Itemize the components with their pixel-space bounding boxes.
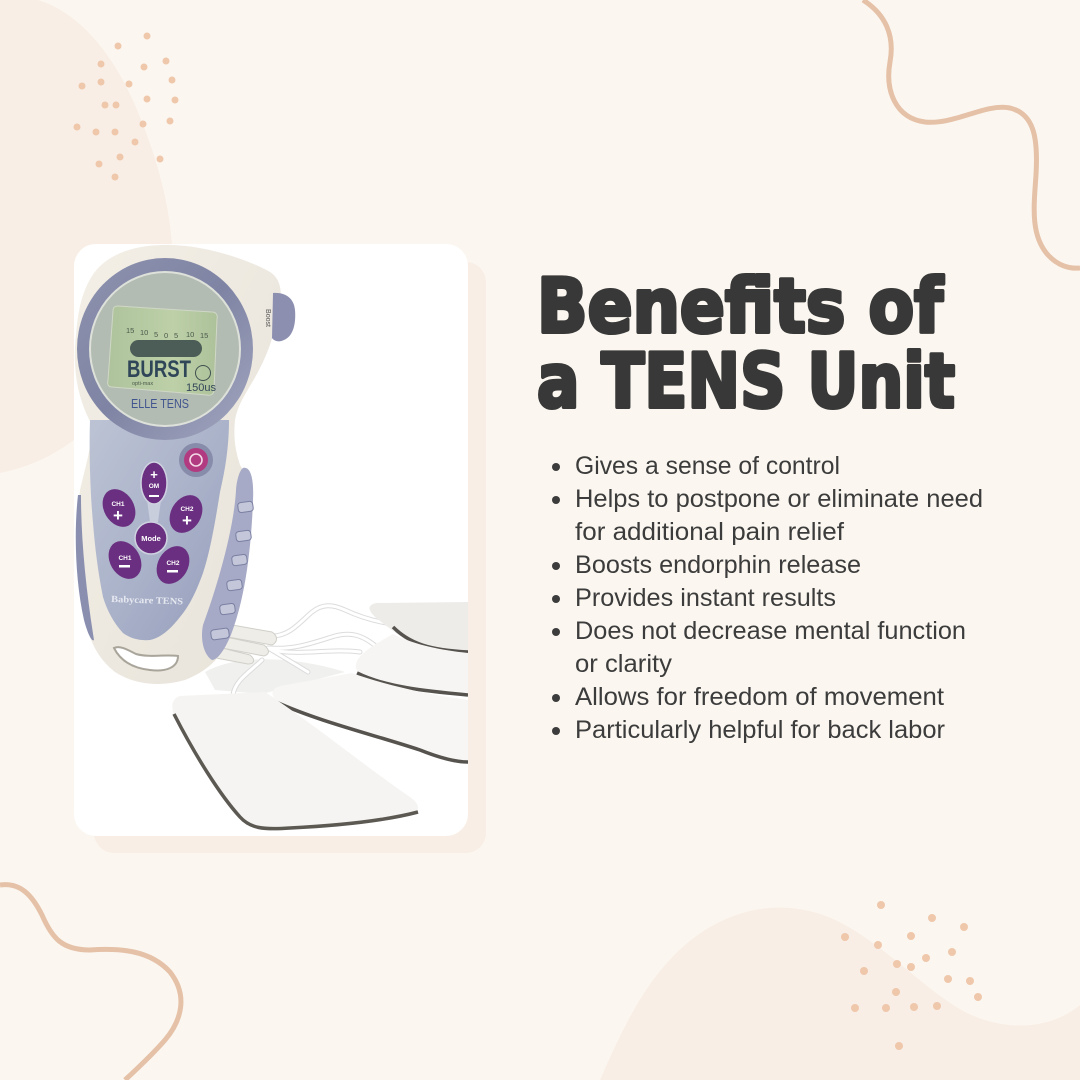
- boost label: Boost: [264, 309, 271, 327]
- CH1 plus button: +: [113, 506, 123, 525]
- OM button: OM: [149, 483, 159, 490]
- right side grip: [202, 468, 253, 660]
- carry handle hole: [114, 647, 178, 670]
- LCD small readout: 150us: [186, 382, 216, 394]
- LCD scale numbers: 10: [186, 330, 194, 339]
- LCD mode readout: BURST: [127, 356, 191, 383]
- electrode wires: [233, 606, 393, 695]
- mode button: Mode: [141, 534, 161, 543]
- list item 4: Provides instant results: [575, 584, 836, 612]
- LCD scale numbers: 15: [200, 331, 208, 340]
- wire highlights: [233, 606, 393, 695]
- OM button: [141, 462, 167, 504]
- LCD scale numbers: 5: [174, 331, 178, 340]
- LCD scale numbers: 5: [154, 330, 158, 339]
- button connector strip: [147, 500, 161, 522]
- title line 1: Benefits of: [537, 262, 944, 350]
- CH1 minus button: CH1: [118, 555, 132, 562]
- list item 5: Does not decrease mental function: [575, 617, 966, 645]
- LCD scale numbers: 10: [140, 328, 148, 337]
- dots: top left cluster: [74, 32, 178, 180]
- LCD scale numbers: 0: [164, 331, 168, 340]
- blob: top left: [0, 0, 172, 473]
- list item 2: [575, 485, 983, 546]
- silver control panel: [90, 420, 229, 640]
- brand label: ELLE TENS: [131, 396, 189, 411]
- CH2 minus button: CH2: [166, 560, 180, 567]
- list item 3: Boosts endorphin release: [575, 551, 861, 579]
- grip ridges: [210, 501, 254, 640]
- list item 2: for additional pain relief: [575, 518, 844, 546]
- photo card: TENS unit: [74, 244, 468, 836]
- CH2 plus button: +: [182, 511, 192, 530]
- device body: [75, 245, 281, 684]
- blob: bottom right: [600, 908, 1080, 1080]
- squiggle: top right: [863, 0, 1080, 268]
- card shadow panel: [94, 262, 486, 853]
- brand text: Babycare TENS: [111, 595, 183, 608]
- LCD caption: opti-max: [132, 381, 153, 387]
- display bezel ring: [77, 258, 253, 440]
- list item 5: [575, 617, 966, 678]
- title line 2: a TENS Unit: [537, 337, 955, 425]
- benefits list: [552, 452, 983, 744]
- electrode pad 3: [356, 634, 468, 695]
- title: [537, 262, 955, 425]
- list item 1: Gives a sense of control: [575, 452, 840, 480]
- soft shadow under device: [205, 659, 345, 694]
- list item 2: Helps to postpone or eliminate need: [575, 485, 983, 513]
- left side grip: [76, 495, 94, 640]
- bullet markers: [552, 463, 560, 735]
- power button: [179, 443, 213, 477]
- OM button: +: [150, 467, 158, 482]
- list item 7: Particularly helpful for back labor: [575, 716, 945, 744]
- CH2 minus button: [156, 546, 190, 584]
- electrode pad 4: [369, 602, 468, 652]
- mode button: [135, 522, 167, 554]
- electrode pad 2: [272, 673, 468, 762]
- list item 5: or clarity: [575, 650, 673, 678]
- dots: bottom right cluster: [841, 901, 982, 1050]
- CH2 plus button: CH2: [180, 506, 194, 513]
- LCD scale numbers: 15: [126, 326, 134, 335]
- CH1 plus button: [102, 489, 136, 527]
- LCD signal arcs: [130, 340, 202, 357]
- list item 6: Allows for freedom of movement: [575, 683, 944, 711]
- boost button: [272, 293, 295, 341]
- CH1 minus button: [108, 541, 142, 579]
- LCD scale numbers: [126, 328, 208, 338]
- CH1 plus button: CH1: [111, 501, 125, 508]
- CH2 plus button: [170, 495, 202, 533]
- display face: [90, 272, 240, 426]
- electrode pad 1: [172, 692, 418, 829]
- LCD screen: [108, 306, 217, 395]
- LCD dial icon: [196, 366, 210, 380]
- squiggle: bottom left: [0, 885, 181, 1080]
- wire connectors: [216, 625, 276, 664]
